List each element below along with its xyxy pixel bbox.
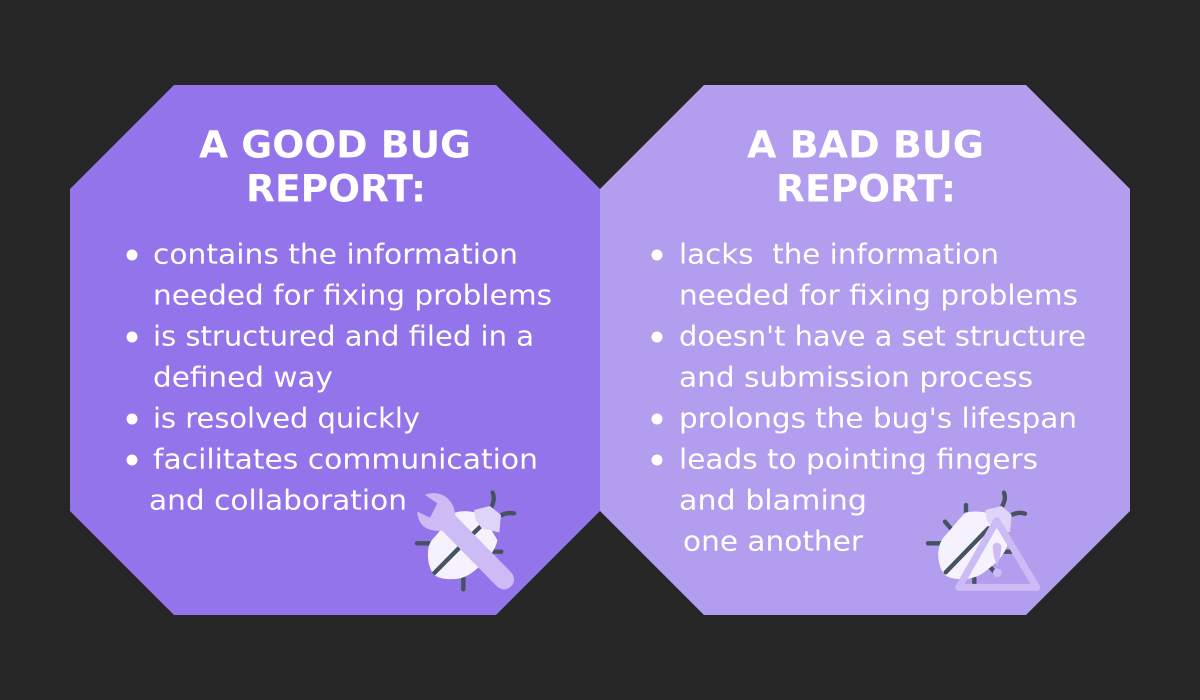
list: bad bug report traits	[652, 238, 1086, 558]
list: good bug report traits: needed for fixing problems	[153, 280, 552, 312]
heading: a bad bug report: REPORT:	[776, 168, 956, 210]
list: bad bug report traits: and blaming	[679, 484, 867, 516]
list: good bug report traits: and collaboration	[149, 484, 407, 516]
icon: bug with wrench	[417, 493, 514, 589]
heading: a good bug report: REPORT:	[246, 168, 426, 210]
list: bad bug report traits: needed for fixing problems	[679, 280, 1078, 312]
icon: bug with warning triangle	[928, 493, 1037, 587]
list: bad bug report traits: and submission process	[679, 362, 1033, 394]
list: bad bug report traits: doesn't have a set structure	[679, 320, 1086, 352]
list: good bug report traits: contains the information	[153, 238, 518, 270]
list: bad bug report traits: leads to pointing fingers	[679, 444, 1038, 476]
list: good bug report traits: defined way	[153, 362, 333, 394]
list: good bug report traits: is structured and filed in a	[153, 320, 534, 352]
list: bad bug report traits: prolongs the bug's lifespan	[679, 402, 1077, 434]
heading: a bad bug report: A BAD BUG	[747, 124, 984, 166]
heading: a bad bug report	[747, 124, 984, 210]
list: good bug report traits: facilitates communication	[153, 444, 538, 476]
panel: good bug report	[70, 85, 600, 615]
heading: a good bug report	[199, 124, 471, 210]
list: good bug report traits	[126, 238, 552, 516]
list: good bug report traits: is resolved quickly	[153, 402, 420, 434]
heading: a good bug report: A GOOD BUG	[199, 124, 471, 166]
panel: bad bug report	[600, 85, 1130, 615]
list: bad bug report traits: one another	[683, 526, 864, 558]
list: bad bug report traits: lacks the information	[679, 238, 999, 270]
